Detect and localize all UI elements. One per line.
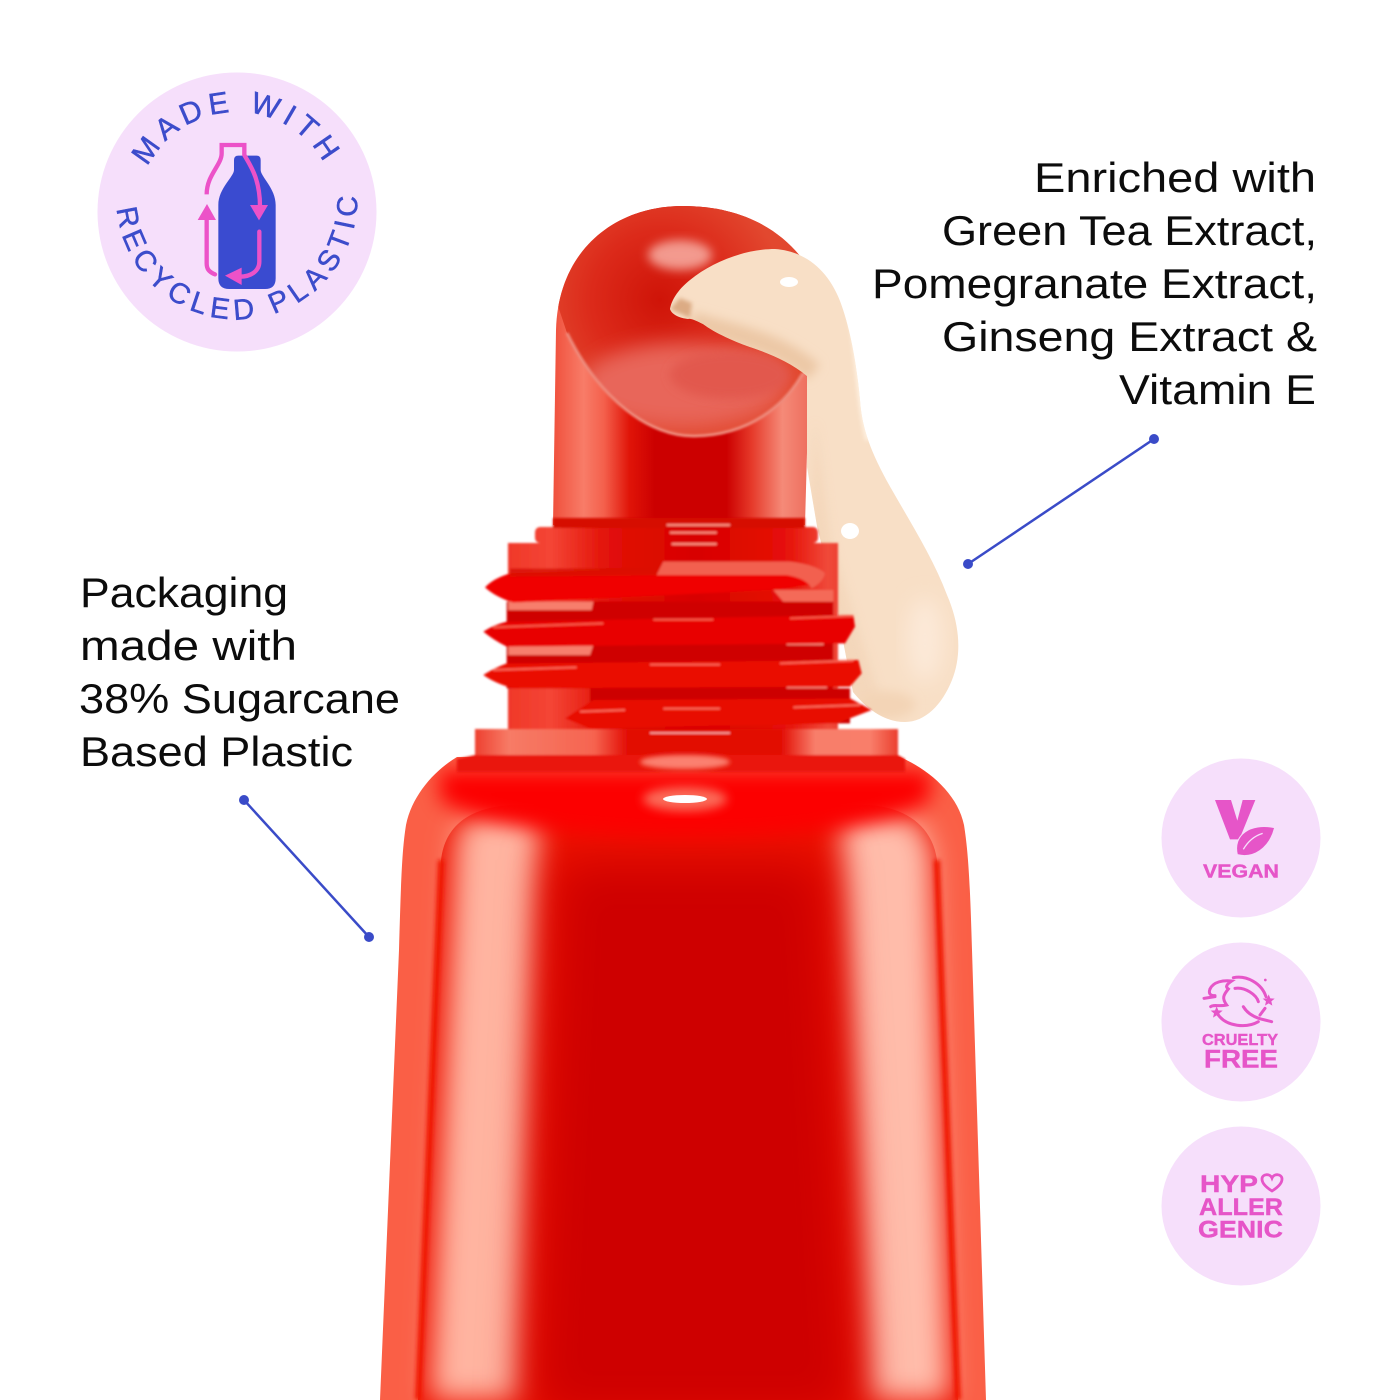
text: packaging callout: Packaging <box>80 569 288 616</box>
text: packaging callout: 38% Sugarcane <box>79 675 400 722</box>
badge: cruelty free: FREE <box>1204 1046 1278 1074</box>
tube body <box>370 750 1000 1400</box>
threaded neck <box>483 518 872 733</box>
text: ingredients callout <box>872 154 1317 413</box>
text: ingredients callout: Green Tea Extract, <box>942 207 1317 254</box>
text: ingredients callout: Enriched with <box>1034 154 1316 201</box>
badge circle <box>98 72 376 352</box>
text: packaging callout <box>79 569 400 775</box>
icon: heart <box>1262 1175 1282 1191</box>
badge: made with recycled plastic <box>98 72 376 352</box>
icon: recycled bottle <box>198 145 276 289</box>
label: hypoallergenic: HYP <box>1200 1171 1258 1198</box>
text: packaging callout: made with <box>80 622 297 669</box>
cream swirl <box>670 249 958 722</box>
arrow: packaging leader line <box>239 795 374 942</box>
badge: vegan <box>1162 758 1320 918</box>
text: ingredients callout: Vitamin E <box>1119 366 1316 413</box>
text: ingredients callout: Pomegranate Extract, <box>872 260 1317 307</box>
angled tip face <box>558 206 803 436</box>
product tube <box>370 200 1000 1400</box>
icon: V with leaf <box>1215 800 1275 856</box>
text: packaging callout: Based Plastic <box>80 728 353 775</box>
arrow: ingredients leader line <box>963 434 1159 569</box>
badge: hypoallergenic: ALLER <box>1199 1194 1283 1221</box>
badge: hypoallergenic <box>1162 1126 1320 1286</box>
applicator tip <box>553 206 807 525</box>
badge: cruelty free <box>1162 942 1320 1102</box>
badge: hypoallergenic: GENIC <box>1198 1216 1283 1244</box>
tube rim <box>457 729 905 772</box>
icon: leaping rabbit <box>1204 977 1275 1026</box>
arc text: made with: MADE WITH <box>131 91 340 165</box>
arc text: recycled plastic: RECYCLED PLASTIC <box>116 196 358 320</box>
text: ingredients callout: Ginseng Extract & <box>942 313 1317 360</box>
label: cruelty free: CRUELTY <box>1202 1032 1279 1049</box>
label: vegan: VEGAN <box>1203 862 1279 882</box>
